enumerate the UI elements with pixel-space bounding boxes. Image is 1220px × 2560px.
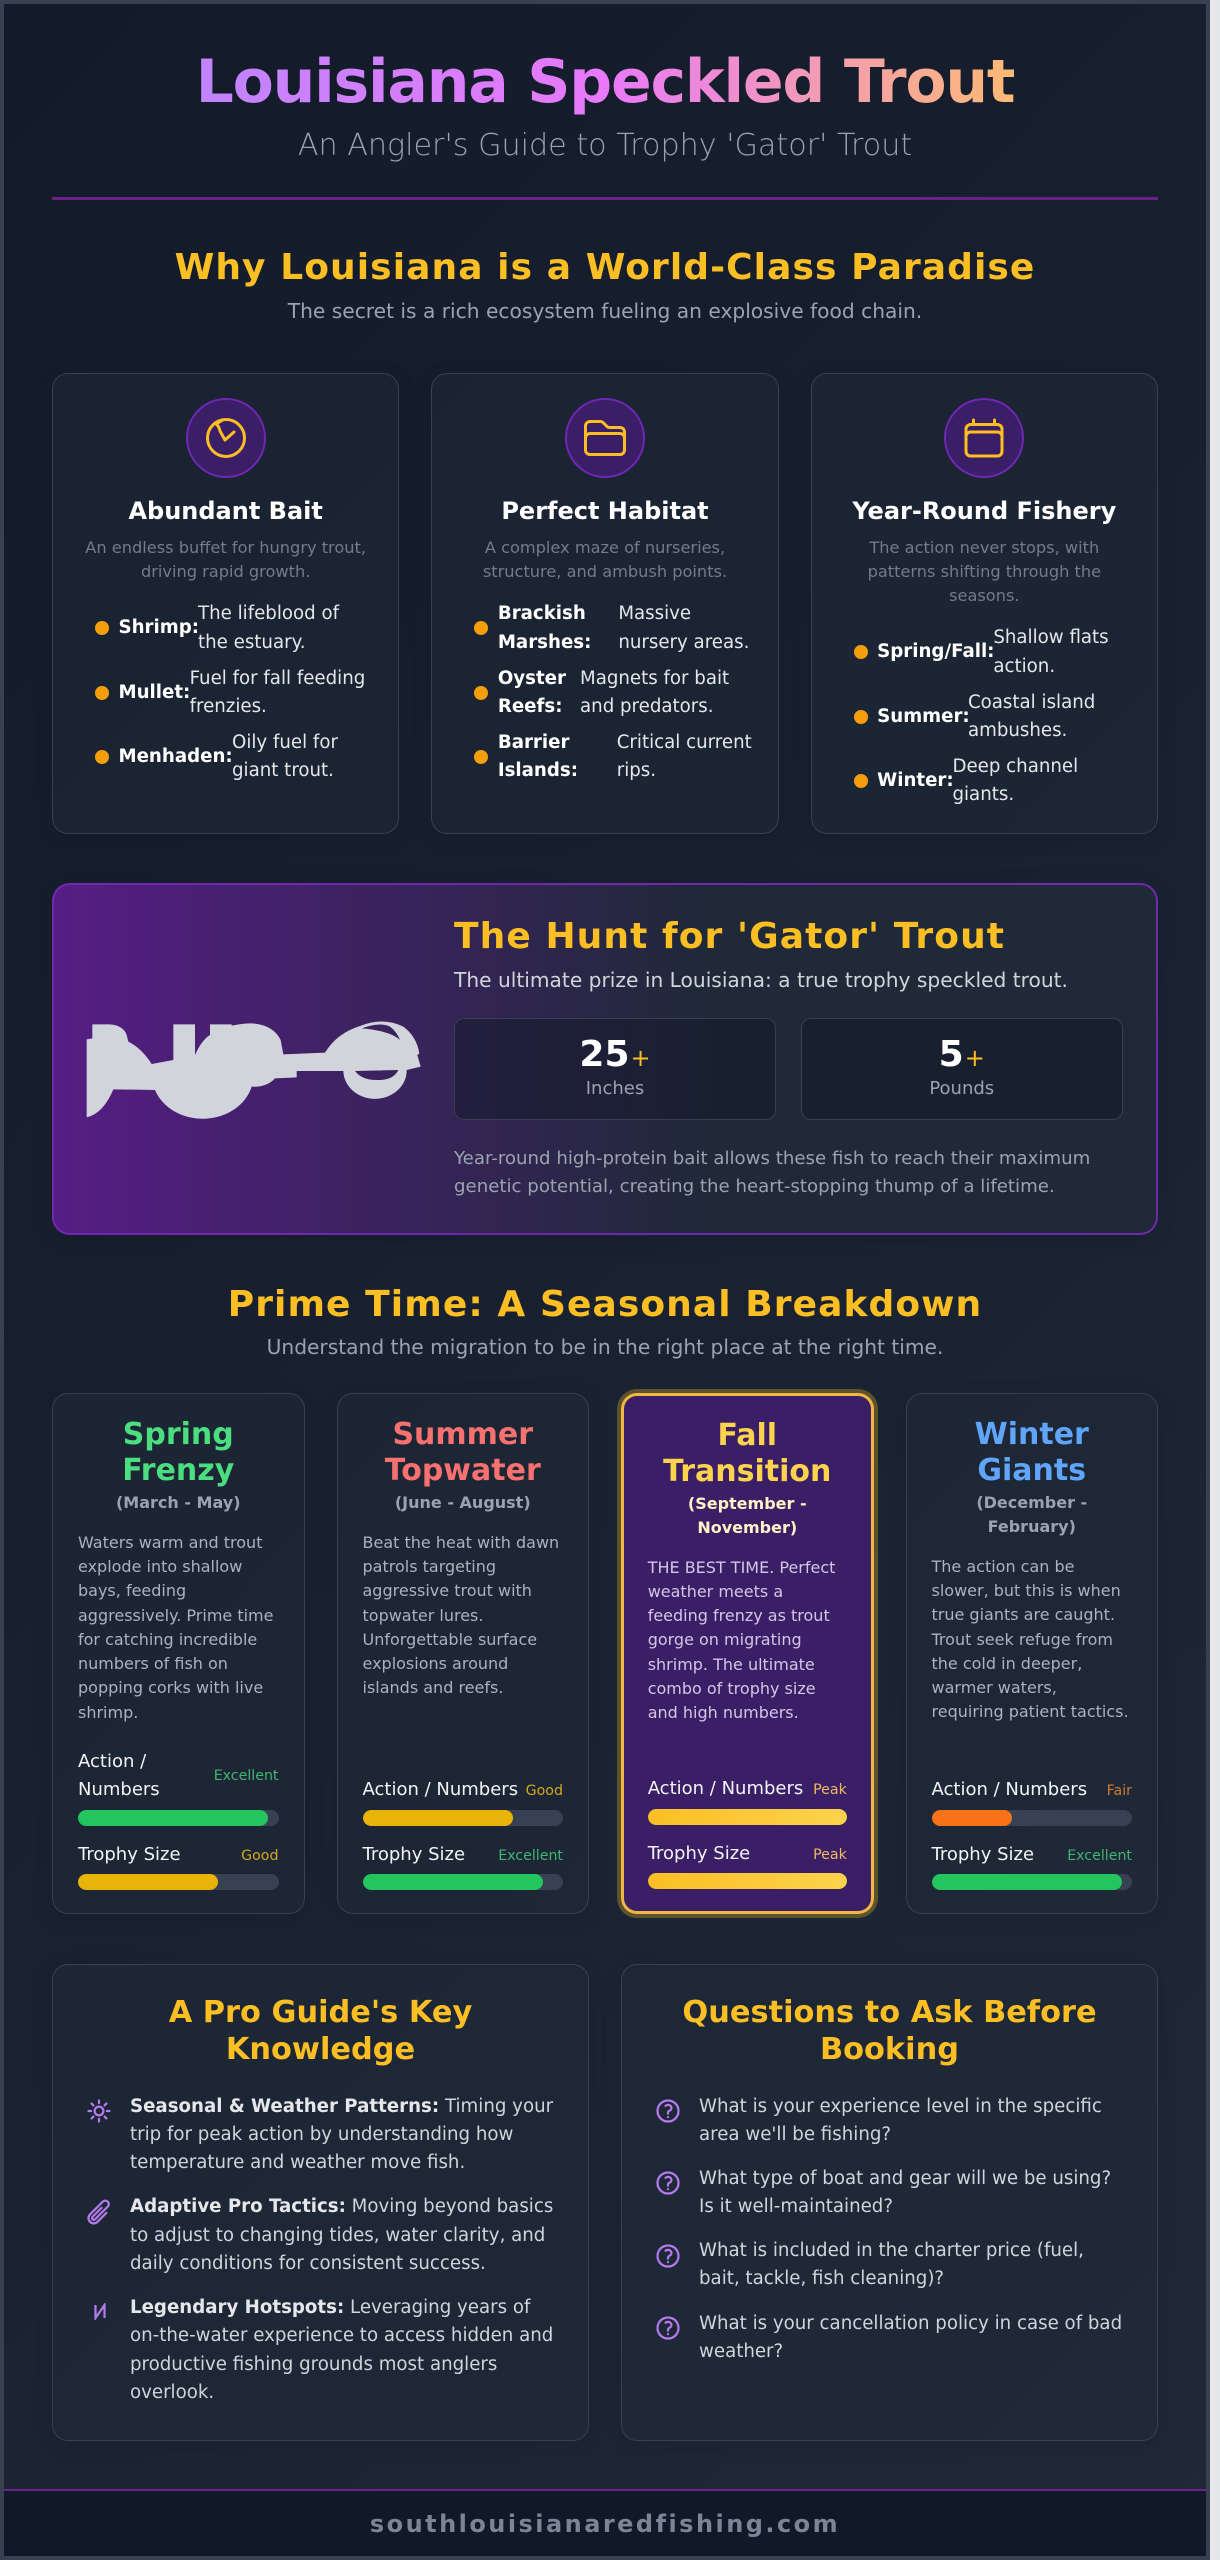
season description: bays, feeding — [78, 1581, 186, 1600]
card description — [483, 538, 727, 580]
text: adaptive tactics: to adjust to changing tides, water clarity, and — [130, 2225, 545, 2246]
list item: oyster reefs: Reefs: — [498, 696, 563, 717]
text: seasonal patterns: trip for peak action by understanding how — [130, 2124, 513, 2145]
stat: inches — [454, 1018, 776, 1120]
list item: summer: Summer: — [877, 706, 970, 727]
subheading: prime time: Understand the migration to be in the right place at the right time. — [267, 1335, 943, 1359]
season months — [976, 1492, 1087, 1536]
text: legendary hotspots: Legendary Hotspots: Leveraging years of — [130, 2297, 530, 2318]
season description: gorge on migrating — [648, 1630, 802, 1649]
card description — [85, 538, 366, 580]
stat: pounds: 5+ — [939, 1034, 985, 1074]
label: action: Action / Numbers — [362, 1779, 518, 1800]
season description: explosions around — [362, 1654, 508, 1673]
season title — [975, 1417, 1089, 1488]
rating: trophy: Peak — [813, 1846, 847, 1862]
season title — [384, 1417, 541, 1488]
subtitle: An Angler's Guide to Trophy 'Gator' Trout — [298, 128, 912, 163]
card description: structure, and ambush points. — [483, 562, 727, 580]
panel heading: Knowledge — [226, 2032, 415, 2067]
text: question 1: area we'll be fishing? — [699, 2124, 891, 2145]
list item: spring/fall: Spring/Fall: — [877, 641, 994, 662]
card description: The action never stops, with — [869, 538, 1099, 556]
text: legendary hotspots: on-the-water experience to access hidden and — [130, 2325, 553, 2346]
subheading: why Louisiana: The secret is a rich ecosystem fueling an explosive food chain. — [288, 299, 922, 323]
list item: shrimp: The lifeblood of — [198, 603, 339, 624]
list item: mullet: Mullet: — [118, 682, 190, 703]
icon: question 1 — [656, 2099, 680, 2123]
season description: Waters warm and trout — [78, 1533, 262, 1552]
card description: A complex maze of nurseries, — [485, 538, 725, 556]
panel: winter giants — [906, 1393, 1158, 1914]
card title: Year-Round Fishery — [852, 497, 1116, 525]
text: adaptive tactics: daily conditions for consistent success. — [130, 2253, 486, 2274]
season title — [663, 1418, 831, 1489]
season title: Frenzy — [122, 1453, 234, 1488]
season description: numbers of fish on — [78, 1654, 228, 1673]
season description: patrols targeting — [362, 1557, 496, 1576]
icon: question 3 — [656, 2244, 680, 2268]
text: question 3 — [699, 2240, 1084, 2289]
card description — [868, 538, 1101, 604]
icon: hotspot mark — [94, 2303, 106, 2320]
season description: aggressively. Prime time — [78, 1606, 273, 1625]
hero paragraph: genetic potential, creating the heart-stopping thump of a lifetime. — [454, 1176, 1055, 1197]
list item: barrier islands: Islands: — [498, 760, 578, 781]
text: question 3: What is included in the charter price (fuel, — [699, 2240, 1084, 2261]
card description: patterns shifting through the — [868, 562, 1101, 580]
season description: The action can be — [932, 1557, 1075, 1576]
panel: summer topwater — [336, 1393, 589, 1914]
text: seasonal patterns — [130, 2096, 554, 2173]
card title: Abundant Bait — [128, 497, 323, 525]
hero paragraph — [454, 1148, 1090, 1197]
panel heading: A Pro Guide's Key — [169, 1995, 472, 2030]
season title: Giants — [977, 1453, 1086, 1488]
season description: islands and reefs. — [362, 1678, 503, 1697]
text: question 4: weather? — [699, 2341, 783, 2362]
text: question 2: What type of boat and gear will we be using? — [699, 2168, 1111, 2189]
list item: mullet: frenzies. — [190, 696, 267, 717]
season months: February) — [988, 1516, 1076, 1536]
bar: trophy 100% — [648, 1873, 847, 1889]
stat: pounds: Pounds — [929, 1078, 994, 1099]
season title: Topwater — [385, 1453, 541, 1488]
icon: question 2 — [656, 2171, 680, 2195]
panel: year-round fishery — [811, 373, 1158, 834]
rating: trophy: Excellent — [1067, 1848, 1132, 1864]
list item: winter: giants. — [952, 784, 1014, 805]
season description: feeding frenzy as trout — [648, 1606, 830, 1625]
title: Louisiana Speckled Trout — [196, 47, 1014, 117]
season description: THE BEST TIME. Perfect — [648, 1558, 835, 1576]
text: question 4: What is your cancellation policy in case of bad — [699, 2313, 1122, 2334]
season description — [931, 1557, 1129, 1721]
bar: action 40% — [932, 1810, 1132, 1826]
bar: action 75% — [362, 1810, 563, 1826]
season title — [122, 1417, 234, 1488]
rating: action: Excellent — [214, 1768, 278, 1784]
panel: fall transition — [621, 1393, 874, 1914]
rating: action: Good — [526, 1783, 563, 1799]
label: action: Action / Numbers — [648, 1778, 803, 1799]
hero paragraph: Year-round high-protein bait allows these fish to reach their maximum — [454, 1148, 1090, 1169]
list item: winter — [854, 756, 1078, 805]
text: legendary hotspots — [130, 2297, 553, 2403]
panel heading — [682, 1995, 1097, 2067]
season description: weather meets a — [648, 1582, 783, 1601]
list item: summer — [854, 692, 1095, 741]
icon: fish silhouette — [86, 1022, 421, 1119]
list item: brackish marshes: Marshes: — [498, 632, 591, 653]
list item: spring/fall — [854, 627, 1109, 677]
rating: trophy: Good — [241, 1848, 278, 1864]
panel heading: Questions to Ask Before — [682, 1995, 1097, 2030]
panel heading — [168, 1995, 472, 2067]
stat: pounds — [801, 1018, 1122, 1120]
list item: brackish marshes: nursery areas. — [618, 632, 749, 653]
season description: combo of trophy size — [648, 1679, 816, 1698]
rating: action: Peak — [813, 1782, 847, 1798]
list item: menhaden: giant trout. — [232, 760, 334, 781]
label: trophy: Trophy Size — [78, 1844, 181, 1864]
season description — [362, 1533, 559, 1697]
season description: warmer waters, — [932, 1678, 1057, 1697]
panel: abundant bait — [52, 373, 399, 834]
text: question 1 — [699, 2096, 1102, 2145]
list item: oyster reefs — [474, 668, 729, 717]
card description: An endless buffet for hungry trout, — [85, 538, 366, 556]
text: question 1: What is your experience level in the specific — [699, 2096, 1102, 2117]
heading: why Louisiana: Why Louisiana is a World-Class Paradise — [175, 246, 1035, 288]
text: legendary hotspots: overlook. — [130, 2382, 214, 2403]
bar: trophy 95% — [932, 1874, 1132, 1890]
list item: brackish marshes: Brackish — [498, 603, 586, 624]
list item: summer: ambushes. — [968, 720, 1067, 741]
text: question 2: Is it well-maintained? — [699, 2196, 893, 2217]
icon: paperclip — [87, 2200, 110, 2224]
season title: Winter — [975, 1417, 1089, 1452]
rating: action: Fair — [1107, 1783, 1132, 1799]
season months: (March - May) — [116, 1492, 241, 1512]
season title: Spring — [123, 1417, 234, 1452]
season months: (September - — [688, 1494, 807, 1512]
label: action — [78, 1751, 160, 1800]
panel: gator trout hero — [52, 883, 1158, 1235]
list item: shrimp: Shrimp: — [118, 617, 199, 638]
label: trophy: Trophy Size — [648, 1842, 750, 1864]
season months — [688, 1494, 807, 1536]
list item: menhaden: Menhaden: — [118, 746, 233, 767]
season description: the cold in deeper, — [932, 1654, 1082, 1673]
season months: November) — [697, 1518, 797, 1536]
list item: barrier islands: Barrier — [498, 732, 569, 753]
list item: mullet: Fuel for fall feeding — [190, 668, 365, 689]
season months: (December - — [976, 1492, 1087, 1512]
panel: spring frenzy — [52, 1393, 304, 1914]
list item: brackish marshes: Massive — [618, 603, 691, 624]
panel: perfect habitat — [431, 373, 779, 834]
hero heading: The Hunt for 'Gator' Trout — [454, 916, 1005, 957]
list item: barrier islands: rips. — [617, 760, 656, 781]
season description: aggressive trout with — [362, 1581, 532, 1600]
panel: questions before booking — [621, 1964, 1158, 2441]
rating: trophy: Excellent — [498, 1848, 563, 1864]
list item: oyster reefs: and predators. — [580, 696, 714, 717]
label: trophy: Trophy Size — [362, 1844, 465, 1864]
icon: calendar badge — [944, 398, 1024, 478]
season description: and high numbers. — [648, 1703, 799, 1722]
bar: trophy 70% — [78, 1874, 278, 1890]
label: action: Action / — [78, 1751, 146, 1772]
label: action: Numbers — [78, 1779, 160, 1800]
list item: menhaden — [95, 732, 338, 781]
footer url: southlouisianaredfishing.com — [370, 2510, 840, 2538]
list item: brackish marshes — [474, 603, 749, 653]
list item: oyster reefs: Oyster — [498, 668, 566, 689]
icon: question 4 — [654, 2314, 682, 2342]
season description — [648, 1558, 835, 1722]
bar: action 100% — [648, 1808, 847, 1824]
list item: winter: Deep channel — [952, 756, 1078, 777]
text: question 2 — [699, 2168, 1111, 2217]
stat: inches: 25+ — [579, 1034, 651, 1074]
season description: explode into shallow — [78, 1557, 242, 1576]
season description: true giants are caught. — [932, 1605, 1115, 1624]
panel heading: Booking — [820, 2032, 959, 2067]
season description: for catching incredible — [78, 1630, 257, 1649]
season description: shrimp. — [78, 1703, 138, 1722]
season description: requiring patient tactics. — [932, 1702, 1129, 1721]
season description: popping corks with live — [78, 1678, 263, 1697]
hero subheading: The ultimate prize in Louisiana: a true trophy speckled trout. — [454, 968, 1068, 992]
label: trophy: Trophy Size — [932, 1844, 1034, 1864]
season title: Fall — [717, 1418, 777, 1453]
icon: fish badge — [186, 398, 266, 478]
season months: (June - August) — [395, 1492, 531, 1512]
season description: shrimp. The ultimate — [648, 1655, 815, 1674]
list item: menhaden: Oily fuel for — [232, 732, 338, 753]
season description: Unforgettable surface — [362, 1630, 537, 1649]
season description: Beat the heat with dawn — [362, 1533, 559, 1552]
text: question 4 — [699, 2310, 1122, 2366]
card description: driving rapid growth. — [141, 562, 310, 580]
list item: shrimp: the estuary. — [198, 632, 306, 653]
heading: prime time: Prime Time: A Seasonal Breakdown — [228, 1284, 982, 1324]
season description — [78, 1533, 273, 1722]
list item: spring/fall: Shallow flats — [993, 627, 1109, 648]
list item: spring/fall: action. — [993, 656, 1055, 677]
text: seasonal patterns: temperature and weather move fish. — [130, 2152, 465, 2173]
text: seasonal patterns: Seasonal & Weather Patterns: Timing your — [130, 2096, 553, 2117]
season title: Transition — [663, 1454, 831, 1489]
text: adaptive tactics: Adaptive Pro Tactics: Moving beyond basics — [130, 2196, 553, 2217]
list item: oyster reefs: Magnets for bait — [580, 668, 729, 689]
icon: sun — [87, 2099, 111, 2123]
card description: seasons. — [949, 586, 1020, 604]
season title: Summer — [392, 1417, 533, 1452]
text: adaptive tactics — [130, 2196, 553, 2274]
bar: action 95% — [78, 1810, 278, 1826]
panel: pro guide knowledge — [52, 1964, 589, 2441]
season description: topwater lures. — [362, 1606, 483, 1625]
label: action: Action / Numbers — [932, 1779, 1087, 1800]
text: question 3: bait, tackle, fish cleaning)? — [699, 2268, 944, 2289]
list item: shrimp — [95, 603, 340, 653]
list item: barrier islands: Critical current — [617, 732, 752, 753]
footer — [4, 2489, 1206, 2556]
list item: winter: Winter: — [877, 770, 954, 791]
list item: barrier islands — [474, 732, 752, 781]
bar: trophy 90% — [362, 1874, 563, 1890]
text: legendary hotspots: productive fishing grounds most anglers — [130, 2354, 497, 2375]
list item: summer: Coastal island — [968, 692, 1095, 713]
icon: folder badge — [565, 398, 645, 478]
card title: Perfect Habitat — [501, 497, 709, 525]
season description: Trout seek refuge from — [932, 1630, 1113, 1649]
stat: inches: Inches — [586, 1078, 644, 1099]
season description: slower, but this is when — [932, 1581, 1121, 1600]
list item: mullet — [95, 668, 365, 717]
